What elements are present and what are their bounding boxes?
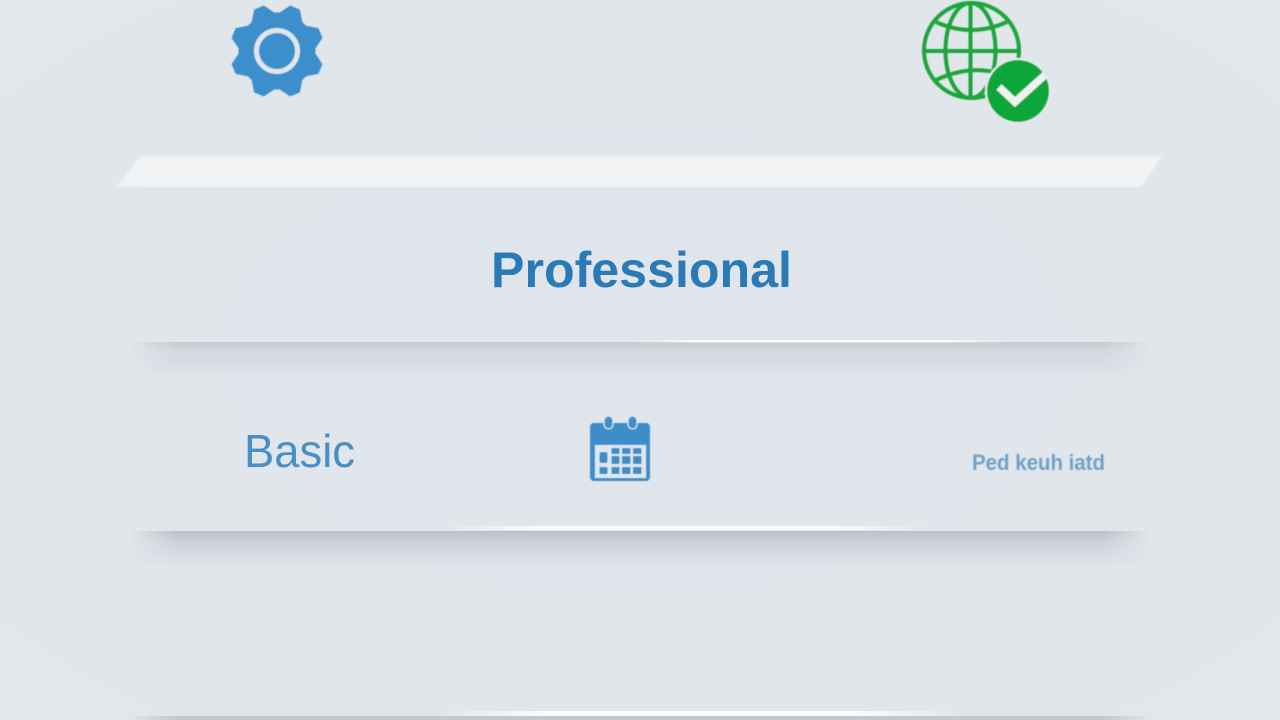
divider shadow 2 — [140, 526, 1140, 557]
label: garbled small text: Ped keuh iatd — [972, 450, 1105, 475]
top light bar — [117, 156, 1162, 190]
divider shadow 1 — [143, 340, 1137, 365]
icon: gear — [229, 3, 325, 99]
check badge — [985, 58, 1051, 124]
globe — [924, 3, 1019, 98]
heading: Professional: Professional — [491, 242, 792, 298]
label: Basic: Basic — [244, 425, 355, 477]
icon: globe with check badge — [924, 3, 1051, 124]
divider shadow 3 — [130, 711, 1150, 720]
icon: calendar — [590, 416, 650, 481]
